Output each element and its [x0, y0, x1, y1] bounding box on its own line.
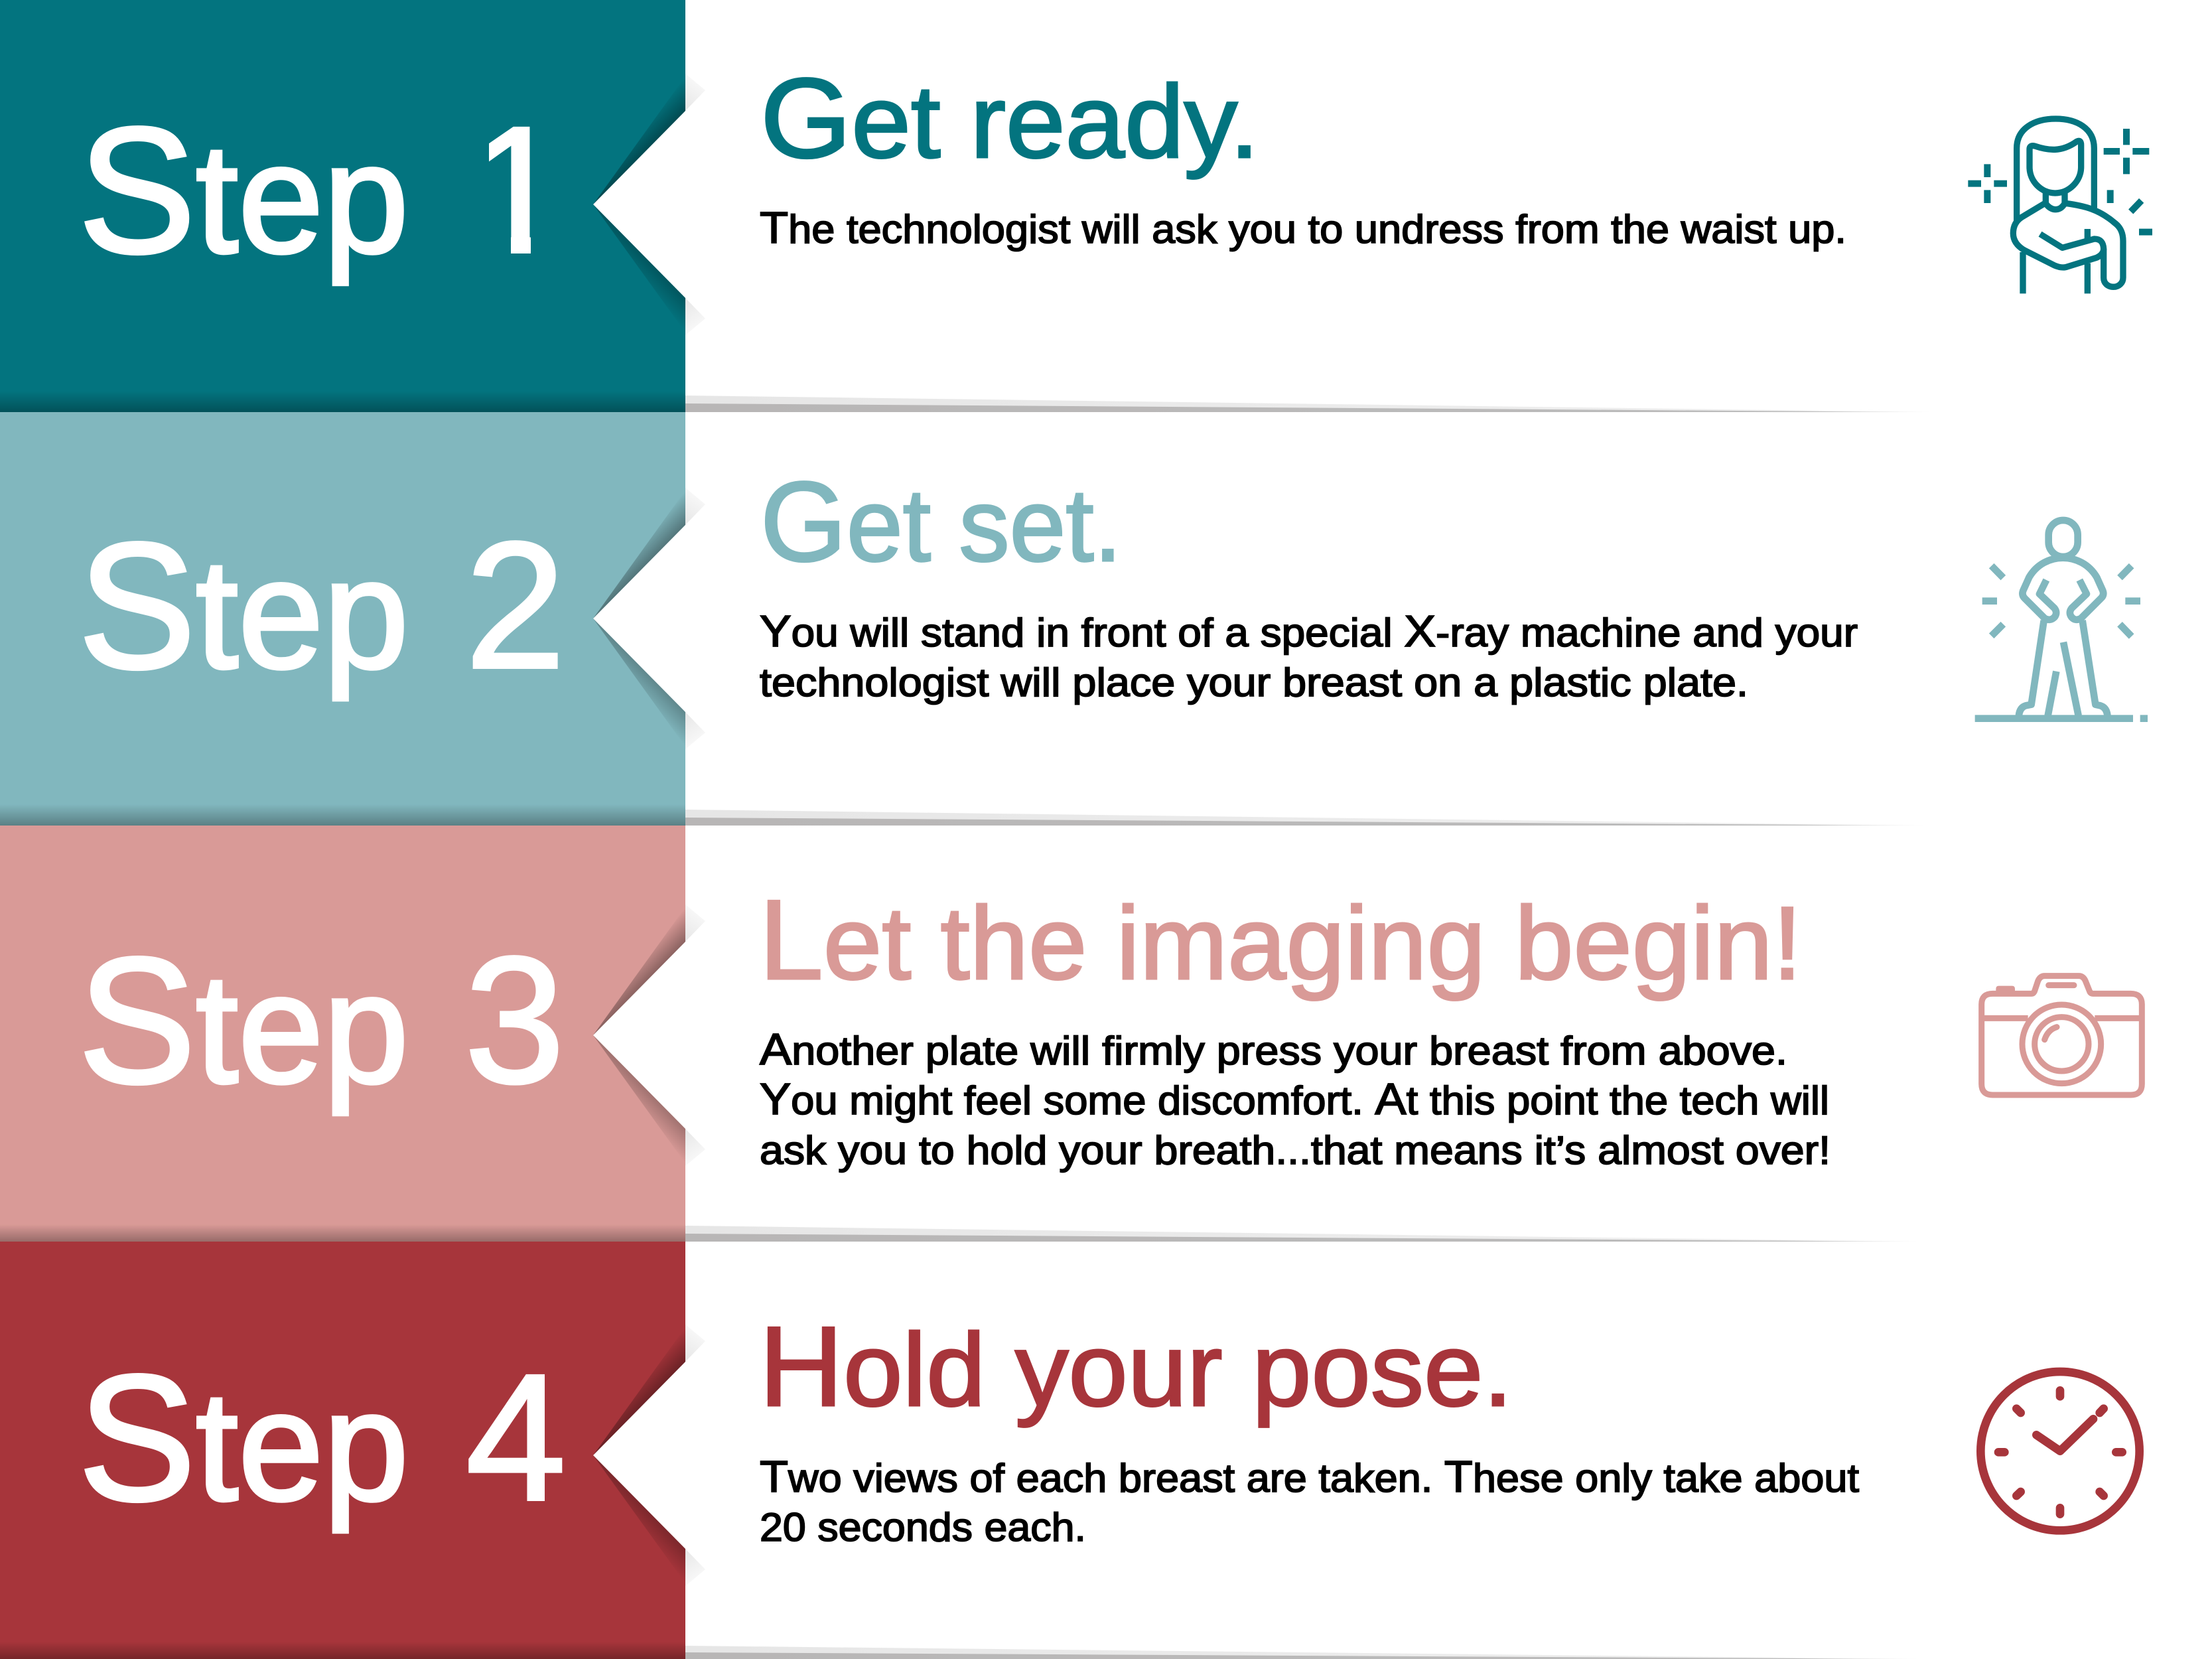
step 1 label	[78, 89, 571, 291]
step 4 divider	[685, 1646, 1917, 1659]
step 3 chevron notch	[593, 904, 705, 1166]
step 1 colour band	[0, 0, 685, 412]
panel: step 4	[0, 1242, 2140, 1659]
step 2 body text: You will stand in front of a special X-ray machine and your	[760, 607, 1858, 656]
step 4 band bottom shadow	[0, 1642, 685, 1659]
step 1 body text: The technologist will ask you to undress from the waist up.	[760, 203, 1846, 253]
step 3 body text: You might feel some discomfort. At this point the tech will	[760, 1074, 1829, 1124]
step 4 chevron notch	[593, 1325, 705, 1586]
panel: step 2	[0, 412, 2148, 826]
step 4 body text	[760, 1452, 1859, 1550]
step 4 body text: Two views of each breast are taken. These only take about	[760, 1452, 1859, 1502]
step 3 body text: ask you to hold your breath...that means it’s almost over!	[760, 1128, 1831, 1173]
step 4 label: Step	[78, 1338, 409, 1538]
step 3 heading: Let the imaging begin!	[759, 877, 1802, 1003]
step 4 body text: 20 seconds each.	[760, 1505, 1086, 1550]
step 4 heading: Hold your pose.	[759, 1303, 1513, 1430]
step 2 label: Step	[78, 506, 409, 706]
step 1 label: 1	[467, 89, 567, 291]
icon: woman undressing	[1968, 119, 2152, 293]
step 2 colour band	[0, 412, 685, 826]
panel: step 1	[0, 0, 2152, 412]
step 1 label: Step	[78, 91, 409, 291]
step 2 band bottom shadow	[0, 804, 685, 826]
step 2 chevron notch	[593, 488, 705, 749]
step 3 band bottom shadow	[0, 1224, 685, 1242]
step 2 body text	[760, 607, 1858, 705]
panel: step 3	[0, 826, 2142, 1242]
step 3 colour band	[0, 826, 685, 1242]
step 1 divider	[685, 396, 1931, 412]
icon: standing person	[1975, 520, 2148, 719]
step 3 body text: Another plate will firmly press your breast from above.	[760, 1025, 1787, 1074]
step 3 divider	[685, 1226, 1917, 1242]
step 2 label	[78, 504, 565, 706]
step 3 label: Step	[78, 921, 409, 1121]
step 1 band bottom shadow	[0, 391, 685, 412]
step 3 body text	[760, 1025, 1831, 1173]
step 4 colour band	[0, 1242, 685, 1659]
step 2 body text: technologist will place your breast on a plastic plate.	[760, 660, 1748, 705]
icon: clock	[1980, 1372, 2140, 1530]
step 4 label	[78, 1336, 566, 1538]
step 3 label	[78, 919, 565, 1121]
step 4 label: 4	[466, 1336, 566, 1538]
step 2 heading: Get set.	[760, 459, 1122, 585]
step 1 heading: Get ready.	[760, 55, 1259, 182]
step 2 label: 2	[465, 504, 565, 706]
step 2 divider	[685, 810, 1924, 826]
step 3 label: 3	[464, 919, 565, 1121]
icon: camera	[1982, 976, 2142, 1095]
step 1 chevron notch	[593, 74, 705, 335]
